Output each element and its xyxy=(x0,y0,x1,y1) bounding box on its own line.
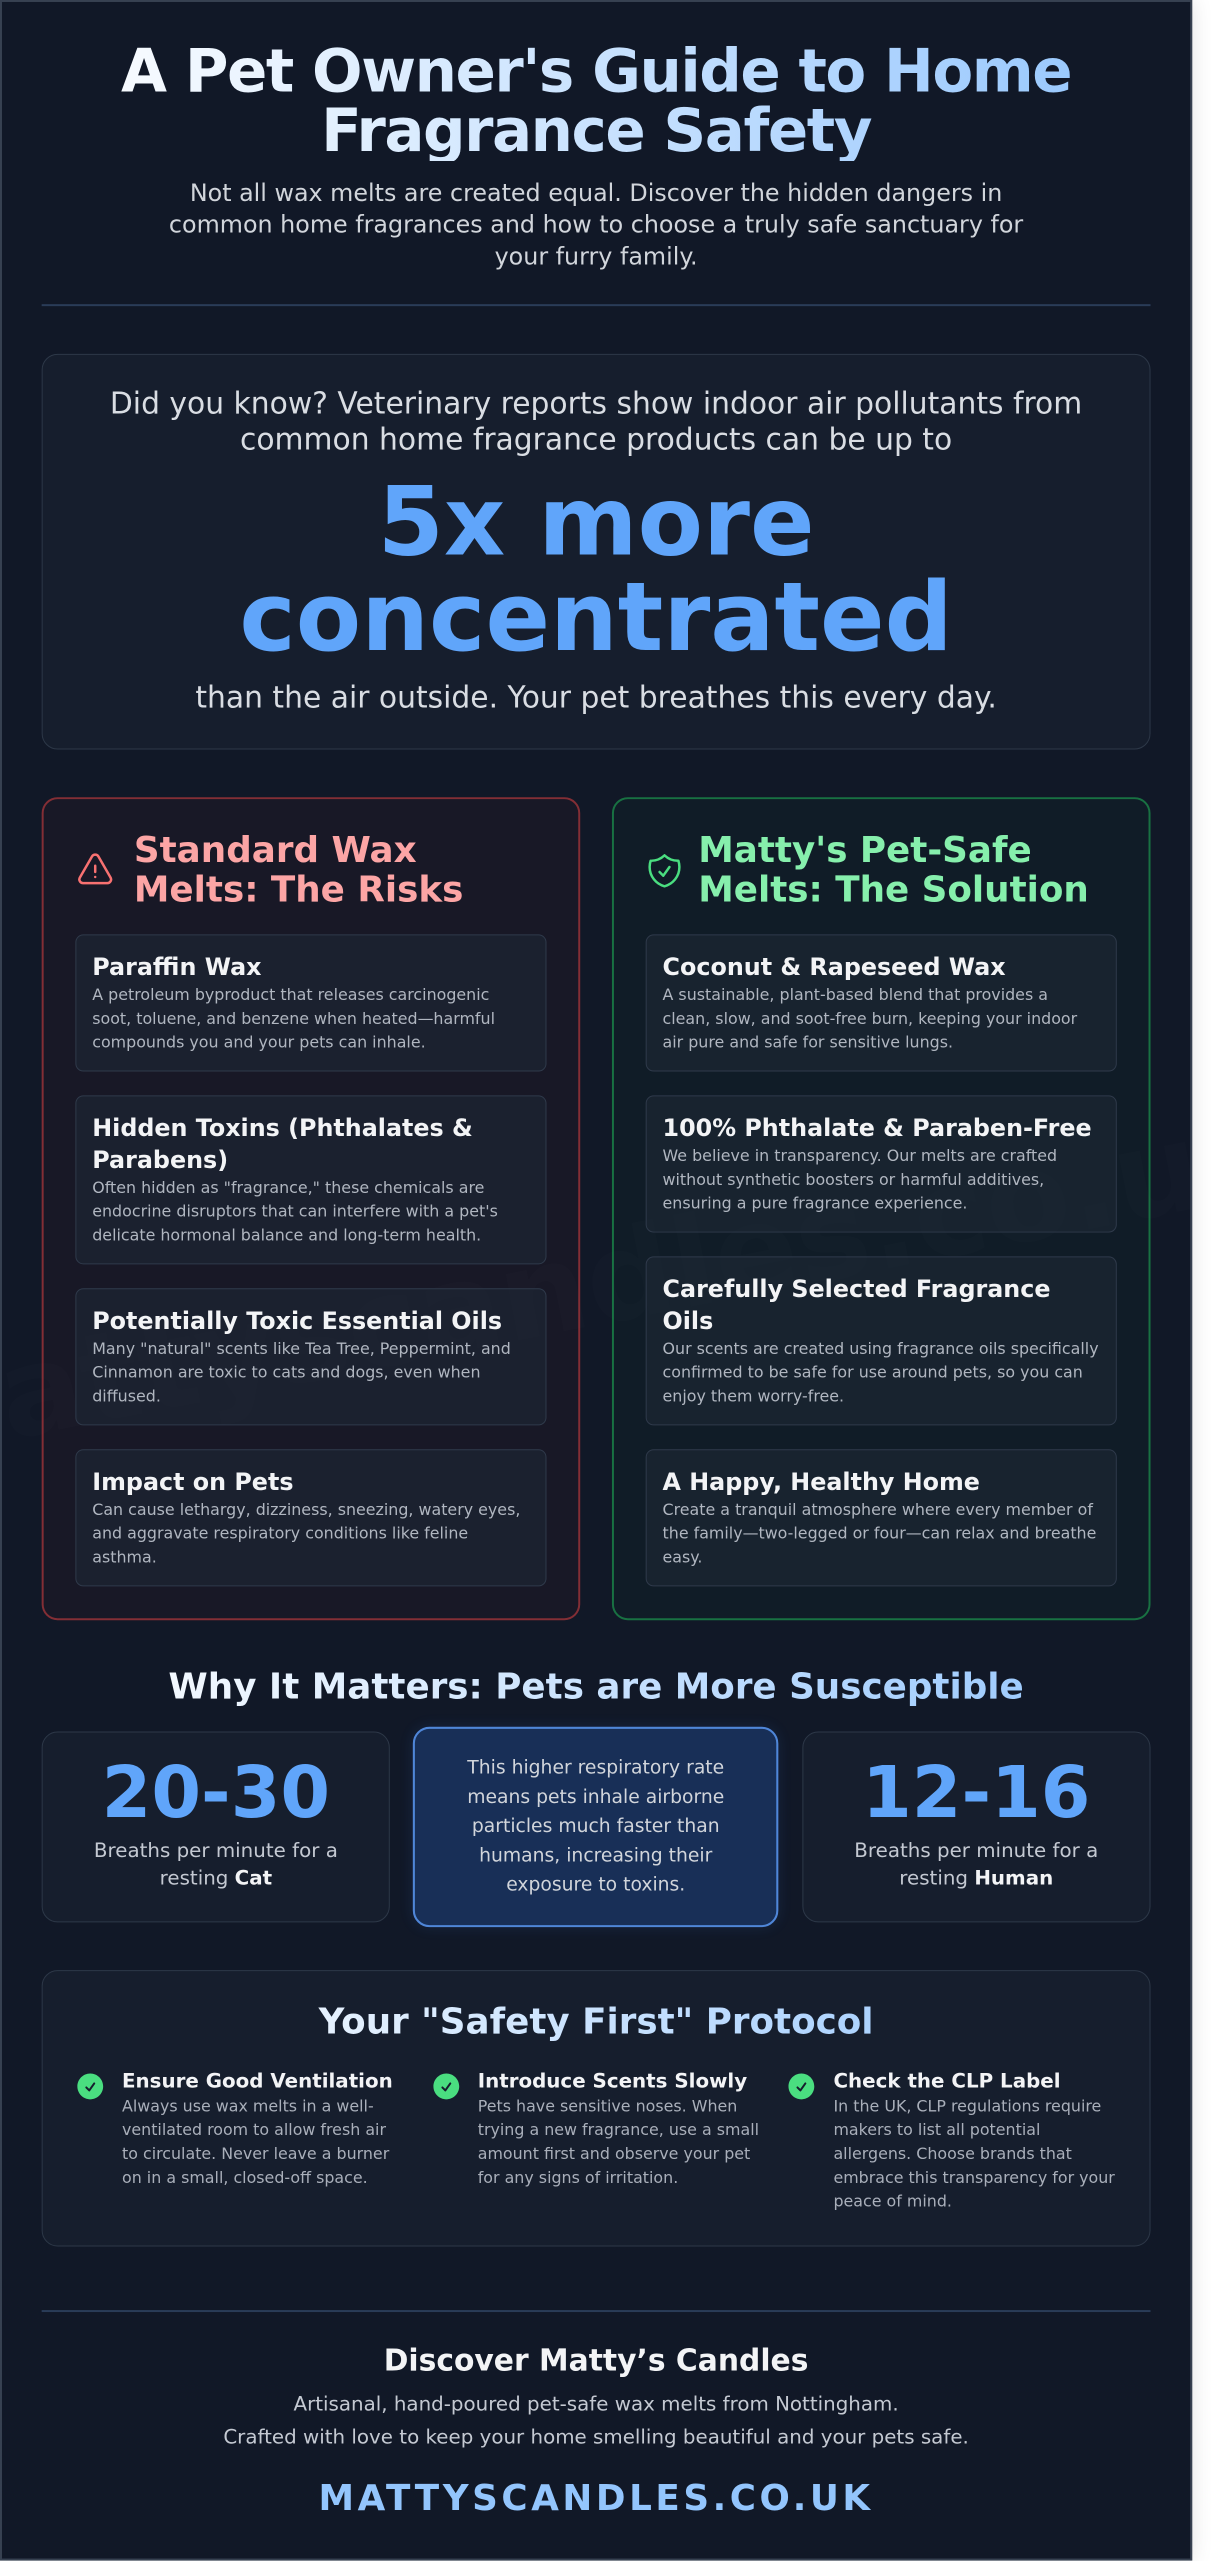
solution: fragrance oils: Our scents are created using fragrance oils specifically confirmed to be safe for use around pets, so you can enjoy them worry-free. xyxy=(663,1339,1099,1406)
risk: paraffin wax: A petroleum byproduct that releases carcinogenic soot, toluene, and benzene when heated—harmful compounds you and your pets can inhale. xyxy=(92,985,495,1052)
stat: human breaths: resting Human xyxy=(899,1866,1053,1890)
solution: coconut and rapeseed wax: A sustainable, plant-based blend that provides a clean, slow, and soot-free burn, keeping your indoor air pure and safe for sensitive lungs. xyxy=(663,985,1077,1052)
footer xyxy=(42,2310,1151,2519)
panel: standard wax melt risks xyxy=(42,797,580,1620)
big number callout: 5x more xyxy=(378,466,815,578)
risk: essential oils xyxy=(75,1288,546,1425)
solution: coconut and rapeseed wax: Coconut & Rapeseed Wax xyxy=(663,953,1006,981)
protocol heading: Your "Safety First" Protocol xyxy=(319,2002,874,2043)
risk: impact on pets xyxy=(75,1449,546,1586)
solution: healthy home: Create a tranquil atmosphere where every member of the family—two-legged or four—can relax and breathe easy. xyxy=(663,1500,1096,1567)
panel heading: risks: Melts: The Risks xyxy=(134,870,463,911)
step: introduce slowly xyxy=(433,2069,759,2187)
heading: why it matters: Why It Matters: Pets are More Susceptible xyxy=(168,1667,1024,1708)
intro text: common home fragrance products can be up to xyxy=(240,422,952,457)
panel: did you know statistic xyxy=(42,354,1151,749)
subtitle: common home fragrances and how to choose a truly safe sanctuary for xyxy=(169,211,1023,239)
panel: matty's pet-safe solution xyxy=(612,797,1151,1620)
panel heading: risks xyxy=(78,830,463,911)
solution: coconut and rapeseed wax xyxy=(646,934,1117,1072)
title xyxy=(42,42,1151,161)
intro text: Did you know? Veterinary reports show indoor air pollutants from xyxy=(110,387,1082,421)
step: CLP label: Check the CLP Label xyxy=(833,2069,1061,2092)
risk: paraffin wax xyxy=(75,934,546,1072)
subtitle: your furry family. xyxy=(495,243,698,270)
panel heading: risks: Standard Wax xyxy=(134,830,417,871)
panel heading: solution xyxy=(648,830,1089,911)
title: Fragrance Safety xyxy=(321,96,871,166)
callout: respiratory rate explanation xyxy=(413,1727,779,1927)
risk: hidden toxins: Often hidden as "fragrance," these chemicals are endocrine disruptors that can interfere with a pet's delicate hormonal balance and long-term health. xyxy=(92,1178,498,1244)
risk: hidden toxins: Hidden Toxins (Phthalates & Parabens) xyxy=(92,1114,473,1174)
step: introduce slowly: Introduce Scents Slowly xyxy=(478,2069,747,2092)
risk: essential oils: Potentially Toxic Essential Oils xyxy=(92,1307,502,1335)
callout: respiratory rate explanation: This higher respiratory rate means pets inhale airborne particles much faster than humans, increasing their exposure to toxins. xyxy=(468,1757,725,1896)
website address: MATTYSCANDLES.CO.UK xyxy=(319,2478,874,2519)
stat: human breaths: 12-16 xyxy=(862,1750,1090,1834)
icon: warning triangle xyxy=(78,853,112,884)
protocol steps xyxy=(77,2069,1115,2211)
comparison columns xyxy=(42,797,1150,1620)
title: A Pet Owner's Guide to Home xyxy=(121,37,1071,106)
solution: phthalate and paraben free: We believe in transparency. Our melts are crafted without synthetic boosters or harmful additives, ensuring a pure fragrance experience. xyxy=(663,1146,1057,1213)
subtitle xyxy=(169,179,1024,270)
big number callout: concentrated xyxy=(239,562,953,673)
solution: fragrance oils: Carefully Selected Fragrance Oils xyxy=(663,1275,1051,1335)
step: ventilation xyxy=(77,2069,393,2187)
step: ventilation: Ensure Good Ventilation xyxy=(122,2069,393,2092)
icon: shield check xyxy=(648,854,681,888)
stat: human breaths: Breaths per minute for a xyxy=(854,1838,1098,1862)
risk: impact on pets: Impact on Pets xyxy=(92,1468,294,1496)
closing text: than the air outside. Your pet breathes this every day. xyxy=(195,681,997,716)
footer text xyxy=(223,2392,969,2448)
big number callout xyxy=(239,466,953,673)
step: introduce slowly: Pets have sensitive noses. When trying a new fragrance, use a small amount first and observe your pet for any signs of irritation. xyxy=(478,2096,759,2187)
risk: impact on pets: Can cause lethargy, dizziness, sneezing, watery eyes, and aggravate respiratory conditions like feline asthma. xyxy=(92,1500,520,1567)
solution: fragrance oils xyxy=(646,1256,1117,1425)
footer heading: Discover Matty’s Candles xyxy=(384,2344,808,2379)
stat: cat breaths: resting Cat xyxy=(160,1866,272,1890)
step: CLP label xyxy=(788,2069,1115,2211)
stat: cat breaths: 20-30 xyxy=(102,1750,330,1834)
footer text: Artisanal, hand-poured pet-safe wax melts from Nottingham. xyxy=(294,2392,899,2415)
subtitle: Not all wax melts are created equal. Discover the hidden dangers in xyxy=(190,179,1002,207)
panel heading: solution: Melts: The Solution xyxy=(698,870,1089,911)
header xyxy=(42,42,1151,306)
panel: safety first protocol xyxy=(42,1970,1151,2246)
stat: cat breaths: Breaths per minute for a xyxy=(94,1838,338,1862)
breathing rate comparison xyxy=(42,1724,1150,1930)
solution: healthy home: A Happy, Healthy Home xyxy=(663,1468,980,1496)
solution: phthalate and paraben free xyxy=(646,1095,1117,1233)
risk: essential oils: Many "natural" scents like Tea Tree, Peppermint, and Cinnamon are toxic to cats and dogs, even when diffused. xyxy=(92,1339,511,1406)
stat: cat breaths xyxy=(42,1732,390,1922)
intro text xyxy=(110,387,1082,457)
risk: hidden toxins xyxy=(75,1095,546,1264)
stat: human breaths xyxy=(802,1732,1151,1922)
panel heading: solution: Matty's Pet-Safe xyxy=(698,830,1032,871)
footer text: Crafted with love to keep your home smelling beautiful and your pets safe. xyxy=(223,2424,969,2448)
step: CLP label: In the UK, CLP regulations require makers to list all potential allergens. Choose brands that embrace this transparency for your peace of mind. xyxy=(833,2096,1115,2211)
solution: phthalate and paraben free: 100% Phthalate & Paraben-Free xyxy=(663,1114,1092,1142)
solution: healthy home xyxy=(646,1449,1117,1586)
protocol heading xyxy=(74,2003,1118,2043)
risk: paraffin wax: Paraffin Wax xyxy=(92,953,262,981)
step: ventilation: Always use wax melts in a well-ventilated room to allow fresh air to circulate. Never leave a burner on in a small, closed-off space. xyxy=(122,2096,389,2187)
